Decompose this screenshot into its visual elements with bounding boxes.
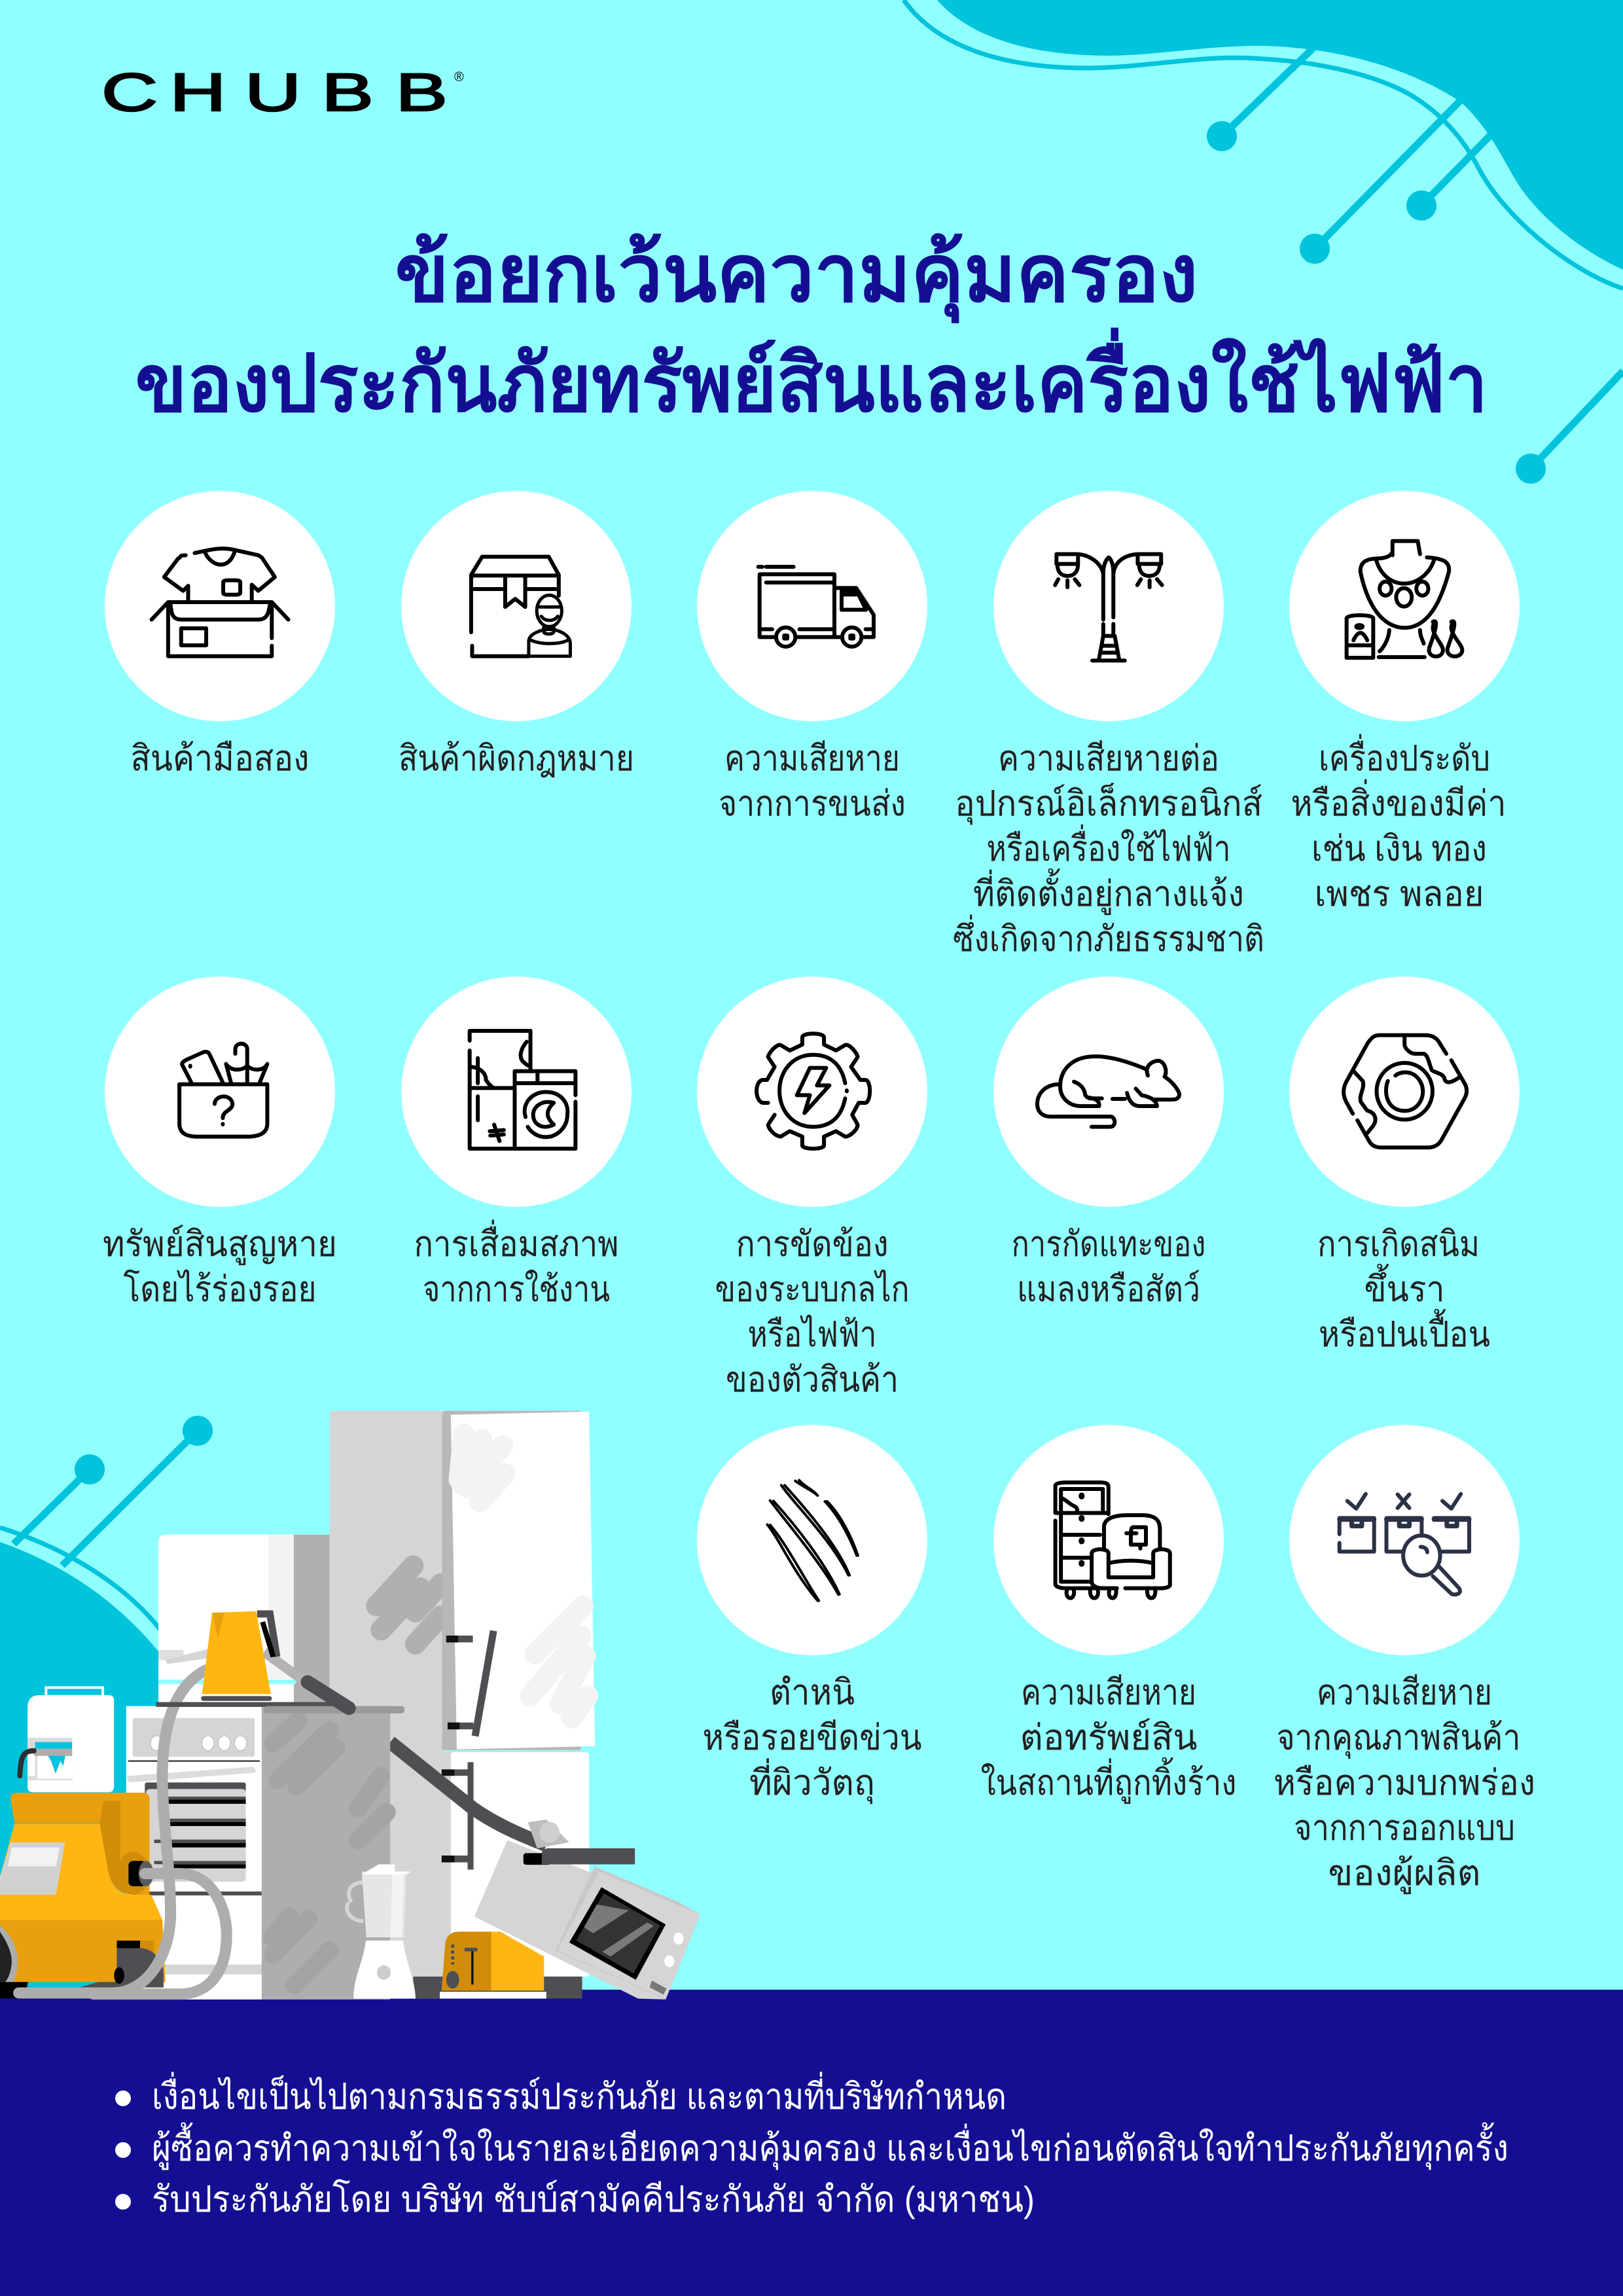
icon: jewellery on stand — [1347, 541, 1462, 658]
decorative blob: lower left with circuit dots — [0, 1416, 213, 2003]
labels: row 2: การขัดข้อง — [736, 1225, 889, 1264]
labels: row 3: ของผู้ผลิต — [1329, 1854, 1480, 1894]
labels: row 1: สินค้ามือสอง — [131, 739, 309, 778]
icon: abandoned cabinet and armchair — [1056, 1482, 1170, 1598]
icon: gear with lightning bolt — [757, 1033, 870, 1149]
illustration: pile of home appliances — [0, 1411, 700, 2000]
labels: row 1: เครื่องประดับ — [1319, 734, 1490, 778]
blender — [347, 1865, 416, 1999]
logo: CHUBB: CHUBB — [101, 62, 448, 122]
title — [135, 229, 1488, 428]
icon: inspection of boxes with magnifier — [1340, 1494, 1469, 1594]
logo: CHUBB: ® — [454, 70, 464, 84]
labels: row 2: การเกิดสนิม — [1317, 1225, 1480, 1264]
microwave — [474, 1840, 700, 2000]
labels: row 2: ของระบบกลไก — [715, 1269, 910, 1309]
labels: row 1: หรือสิ่งของมีค่า — [1291, 779, 1507, 823]
labels: row 2: ของตัวสินค้า — [726, 1360, 899, 1399]
icon: delivery truck — [758, 567, 874, 647]
icon: illegal goods box with thief — [471, 557, 570, 656]
labels: row 1 — [131, 734, 1507, 959]
icon: street lamp — [1055, 554, 1162, 660]
labels: row 1: ซึ่งเกิดจากภัยธรรมชาติ — [953, 914, 1264, 959]
labels: row 2: หรือไฟฟ้า — [747, 1314, 877, 1354]
labels: row 3: จากการออกแบบ — [1294, 1808, 1515, 1848]
icon: deteriorated fridge and washer — [470, 1031, 575, 1149]
labels: row 2: การกัดแทะของ — [1012, 1225, 1205, 1264]
kettle, counter, blender, toaster, microwave — [156, 1611, 700, 2000]
labels: row 1: สินค้าผิดกฎหมาย — [399, 739, 634, 778]
labels: row 2: แมลงหรือสัตว์ — [1017, 1270, 1200, 1309]
footer band — [0, 1990, 1623, 2296]
title: ของประกันภัยทรัพย์สินและเครื่องใช้ไฟฟ้า — [135, 327, 1488, 428]
labels: row 1: ความเสียหายต่อ — [998, 739, 1219, 778]
vacuum hoses — [19, 1669, 226, 1994]
labels: row 3: หรือความบกพร่อง — [1274, 1763, 1535, 1803]
labels: row 2: ขึ้นรา — [1364, 1264, 1445, 1309]
labels: row 3: ในสถานที่ถูกทิ้งร้าง — [980, 1757, 1237, 1804]
labels: row 2: ทรัพย์สินสูญหาย — [103, 1225, 337, 1265]
labels: row 2: จากการใช้งาน — [423, 1269, 610, 1309]
icon: lost items in bag — [179, 1044, 267, 1137]
labels: row 3: จากคุณภาพสินค้า — [1276, 1718, 1521, 1759]
footer bullet list: ผู้ซื้อควรทำความเข้าใจในรายละเอียดความคุ้มครอง และเงื่อนไขก่อนตัดสินใจทำประกันภัยทุกครั้ง — [152, 2123, 1508, 2170]
labels: row 1: เช่น เงิน ทอง — [1311, 829, 1487, 869]
footer bullet list — [115, 2072, 1508, 2219]
fridges — [158, 1411, 595, 1999]
labels: row 1: เพชร พลอย — [1314, 874, 1484, 914]
footer bullet list: เงื่อนไขเป็นไปตามกรมธรรม์ประกันภัย และตามที่บริษัทกำหนด — [152, 2072, 1007, 2117]
coffee maker — [20, 1687, 114, 1792]
labels: row 3: ที่ผิววัตถุ — [749, 1758, 875, 1804]
icon: rusted hex nut — [1344, 1035, 1467, 1147]
vacuum cleaner — [0, 1793, 166, 1998]
footer bullet list: รับประกันภัยโดย บริษัท ชับบ์สามัคคีประกันภัย จำกัด (มหาชน) — [152, 2179, 1035, 2219]
kettle — [201, 1611, 277, 1701]
labels: row 2: หรือปนเปื้อน — [1319, 1309, 1490, 1354]
labels: row 1: ที่ติดตั้งอยู่กลางแจ้ง — [973, 869, 1244, 915]
icon: mouse — [1037, 1056, 1179, 1127]
labels: row 3 — [703, 1673, 1535, 1894]
title: ข้อยกเว้นความคุ้มครอง — [395, 229, 1198, 323]
labels: row 1: อุปกรณ์อิเล็กทรอนิกส์ — [955, 783, 1262, 825]
labels: row 3: หรือรอยขีดข่วน — [703, 1718, 921, 1757]
labels: row 2: โดยไร้ร่องรอย — [123, 1269, 317, 1309]
labels: row 3: ความเสียหาย — [1021, 1673, 1196, 1712]
labels: row 1: จากการขนส่ง — [719, 784, 906, 823]
labels: row 2 — [103, 1219, 1490, 1399]
toaster — [440, 1931, 546, 1999]
labels: row 1: ความเสียหาย — [724, 739, 900, 778]
icon: shirt in box — [152, 548, 289, 656]
decorative blob: top right with circuit dots — [904, 0, 1623, 484]
vacuum floor head — [524, 1820, 635, 1865]
labels: row 2: การเสื่อมสภาพ — [414, 1219, 619, 1264]
labels: row 3: ตำหนิ — [770, 1673, 855, 1712]
stove, side panel, coffee maker, vacuum — [0, 1669, 390, 2000]
labels: row 3: ต่อทรัพย์สิน — [1020, 1718, 1198, 1757]
icon: scratches — [767, 1480, 858, 1601]
labels: row 1: หรือเครื่องใช้ไฟฟ้า — [987, 824, 1230, 869]
white circles behind the icons — [105, 491, 1520, 1655]
labels: row 3: ความเสียหาย — [1317, 1673, 1492, 1712]
